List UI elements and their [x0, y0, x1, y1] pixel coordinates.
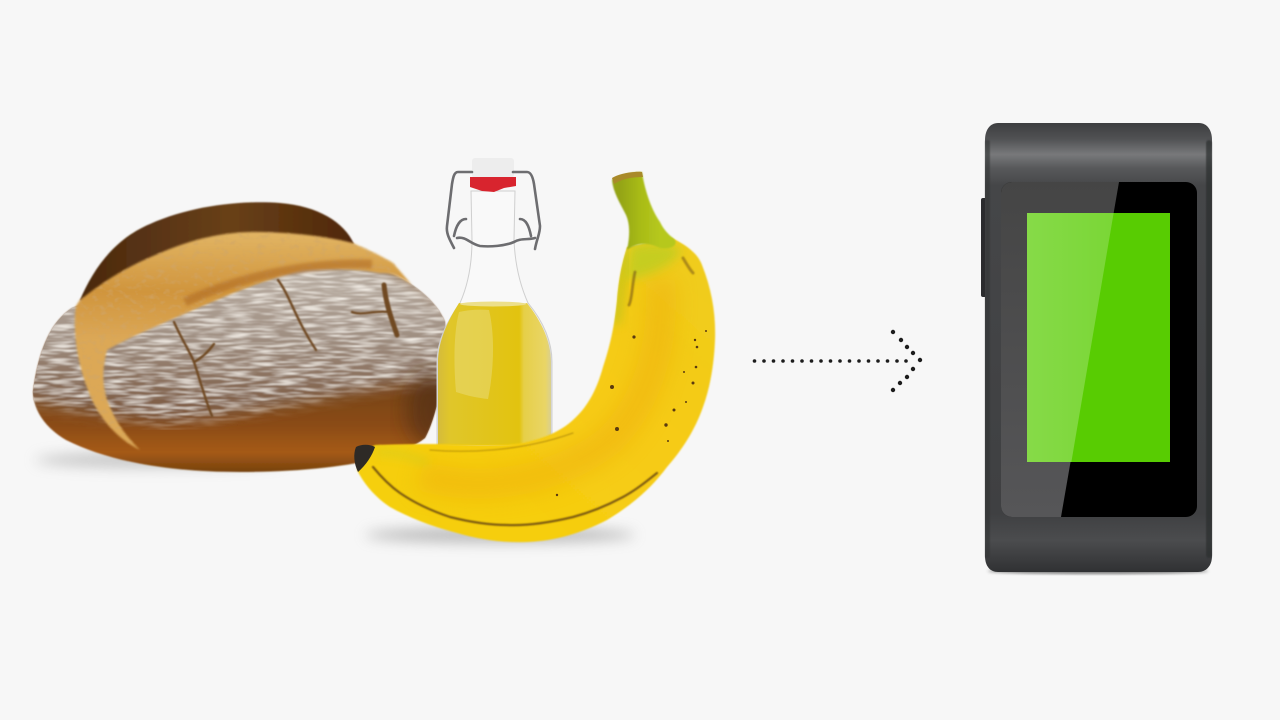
illustration: food powering a tracker — [32, 123, 1212, 576]
banana shading — [378, 243, 682, 484]
bottle oil — [438, 303, 551, 445]
device shadow — [988, 568, 1208, 574]
bottle meniscus — [460, 302, 526, 306]
icon: glass bottle of oil — [437, 158, 552, 445]
device body — [985, 123, 1212, 572]
device green glare — [1027, 213, 1114, 462]
device side button — [981, 198, 988, 297]
bottle wire clasp — [447, 172, 540, 249]
bread shadow — [35, 453, 285, 467]
bottle white cap — [472, 158, 514, 178]
bread golden crust — [75, 232, 412, 450]
banana speckles — [556, 330, 707, 496]
bottle red seal — [470, 177, 516, 192]
bread floured top — [33, 268, 445, 444]
bottle glass — [437, 191, 552, 445]
banana stem — [612, 172, 676, 250]
device screen — [1001, 182, 1197, 517]
device green display — [1027, 213, 1170, 462]
bottle highlight — [454, 310, 493, 399]
banana ridges — [373, 258, 693, 525]
device screen grey glare — [1001, 182, 1119, 517]
icon: loaf of bread — [20, 202, 460, 472]
banana stem tip — [612, 172, 643, 184]
bread back crust — [80, 202, 354, 320]
device right edge — [1206, 140, 1212, 558]
bread main body — [33, 260, 445, 472]
bread shade behind bottle — [398, 360, 436, 444]
banana shadow — [365, 528, 635, 542]
banana black tip — [354, 445, 375, 472]
bread crust shading — [185, 264, 372, 302]
arrow: dotted arrow pointing right — [753, 330, 922, 392]
bread cracks — [174, 280, 397, 416]
icon: fitness tracker device — [981, 123, 1212, 574]
device left edge — [985, 140, 990, 558]
icon: banana — [354, 172, 715, 542]
banana body — [357, 238, 715, 542]
bread flour texture — [20, 262, 460, 422]
